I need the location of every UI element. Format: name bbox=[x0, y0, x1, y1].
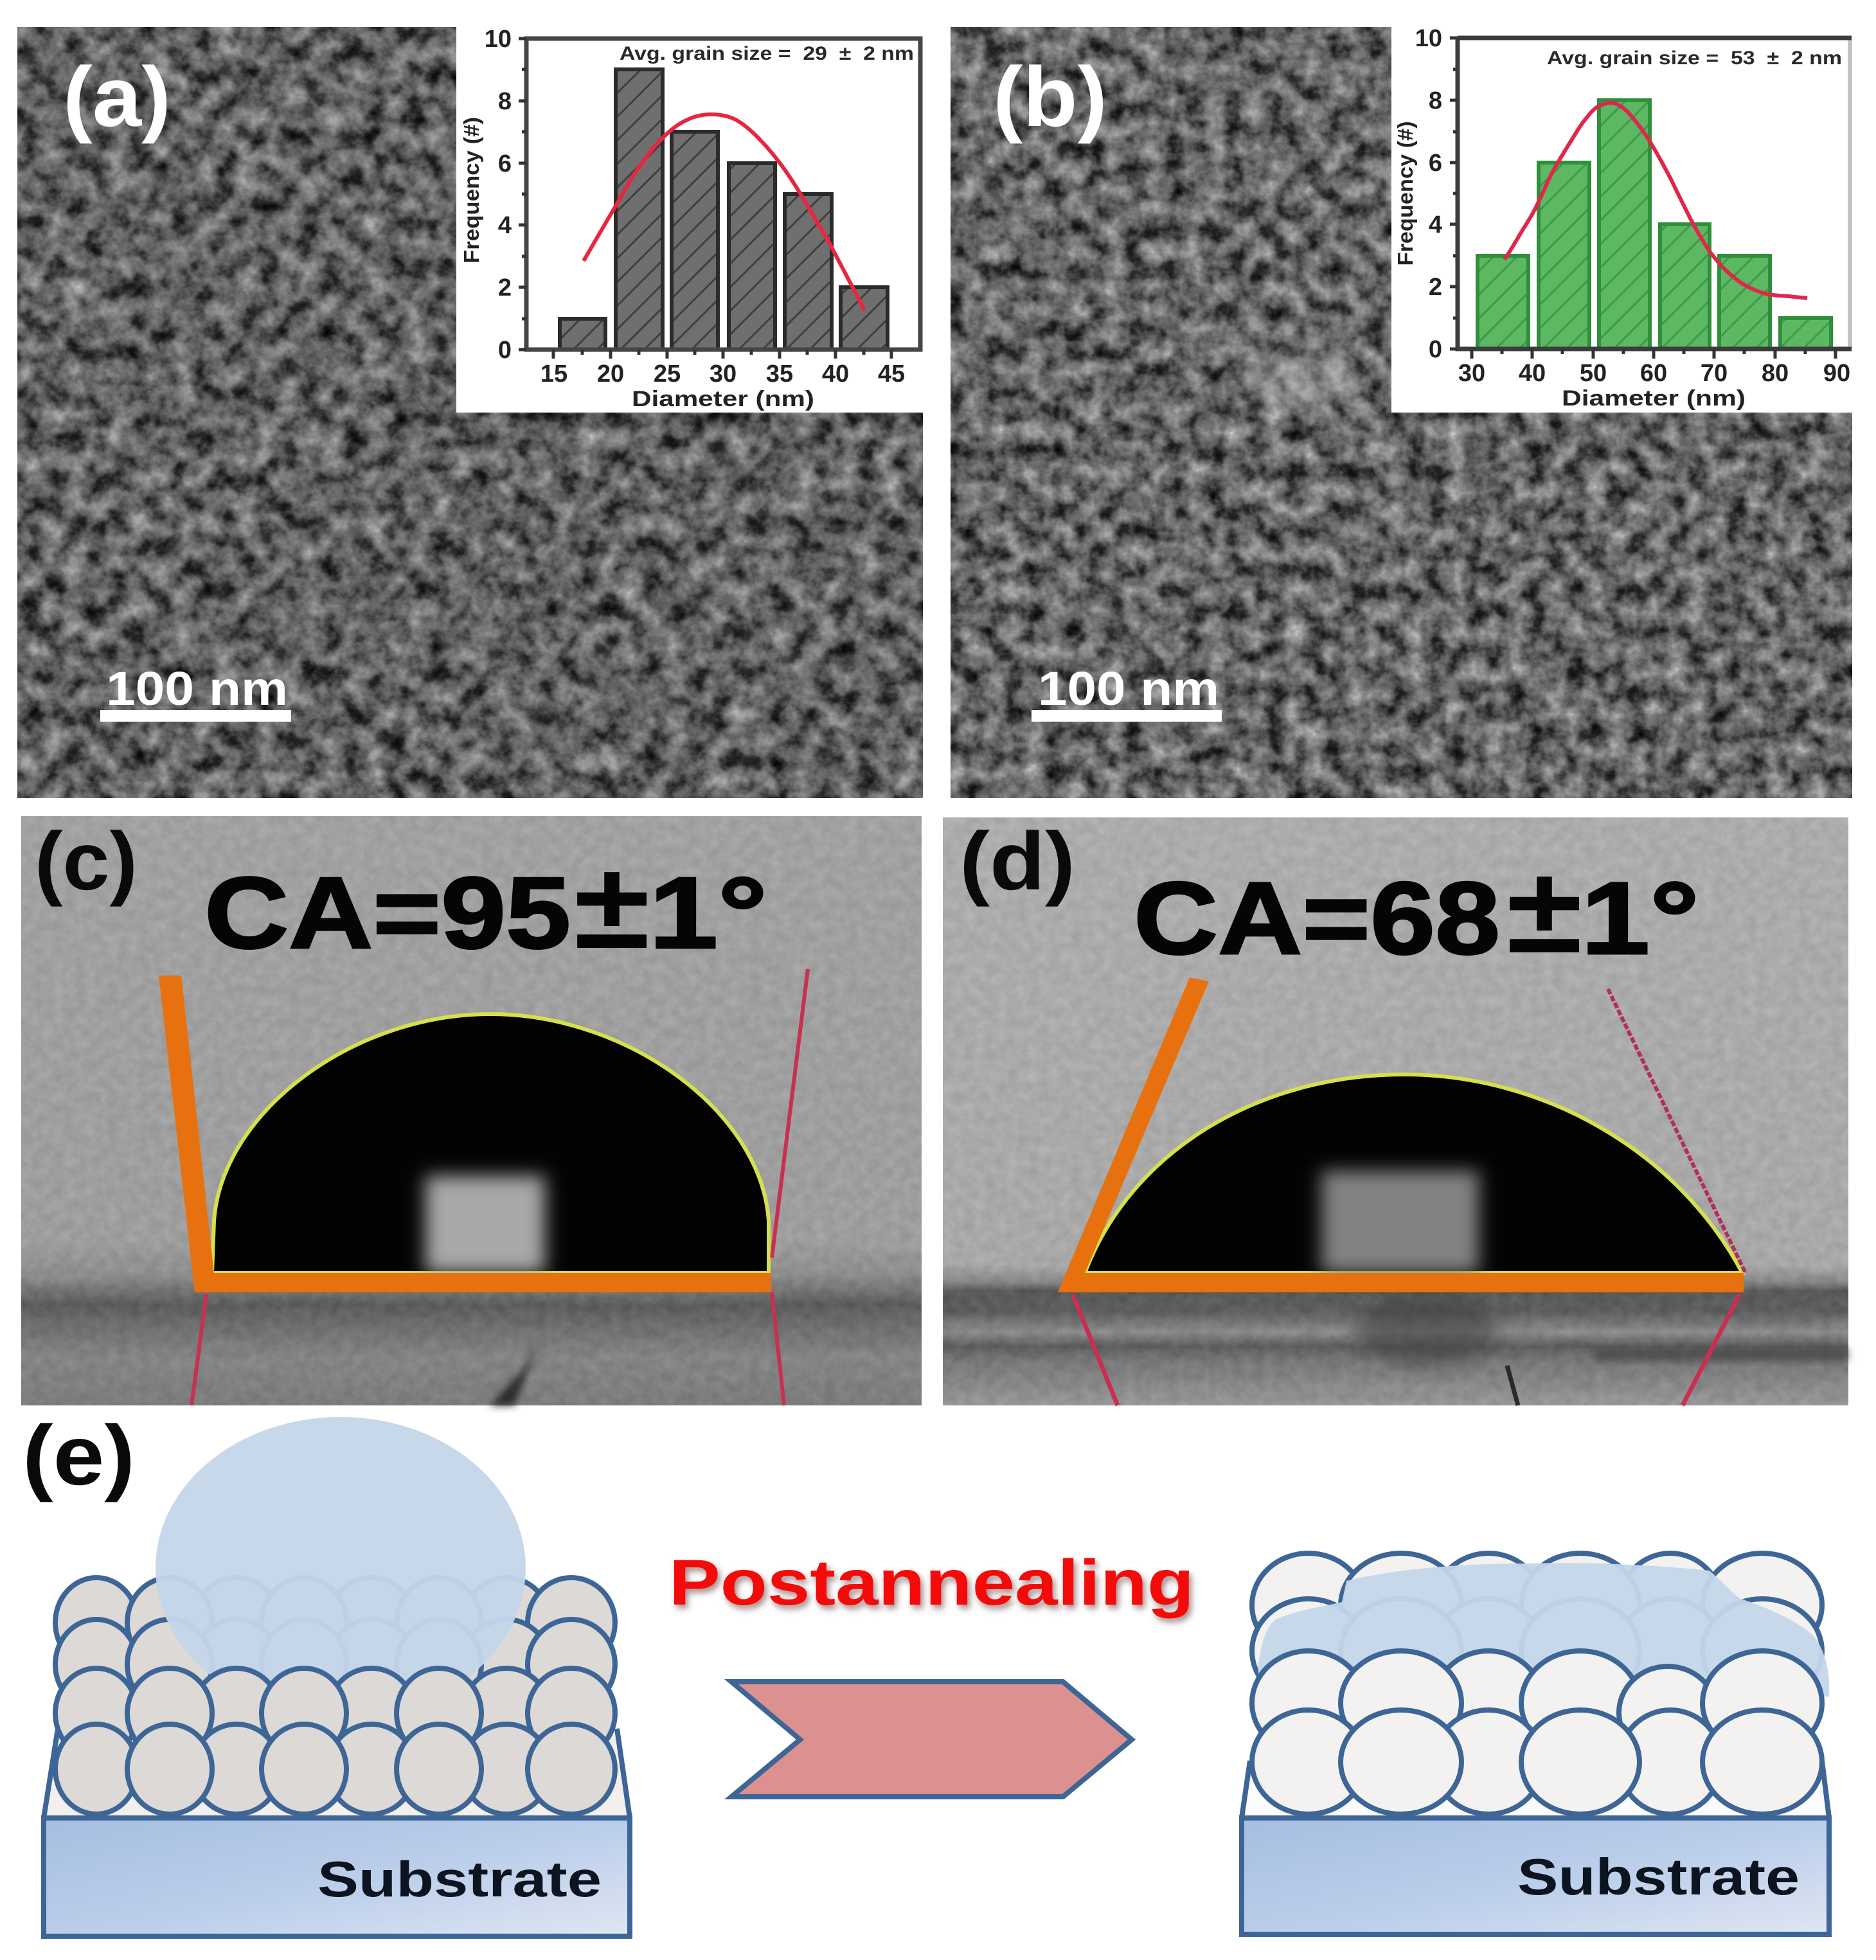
droplet inner reflection bbox=[425, 1176, 545, 1273]
y tick labels: 0 bbox=[498, 337, 512, 364]
x tick labels: 15 bbox=[540, 361, 567, 388]
substrate bbox=[1242, 1818, 1829, 1934]
contact angle value d: CA=68 bbox=[1134, 860, 1500, 976]
grey photo background bbox=[21, 816, 922, 1405]
contact angle value c: CA=95 bbox=[204, 857, 571, 970]
film base bbox=[44, 1729, 630, 1818]
label a: (a) bbox=[63, 49, 171, 144]
panel e: postannealing wetting schematic bbox=[22, 1408, 1829, 1936]
right grey edge bbox=[1848, 40, 1852, 348]
inset white background bbox=[456, 13, 923, 413]
substrate bbox=[44, 1818, 630, 1936]
x tick labels: 30 bbox=[710, 361, 737, 388]
axes bbox=[1458, 38, 1852, 349]
process arrow bbox=[731, 1682, 1132, 1797]
dark band at right bbox=[1594, 1348, 1848, 1361]
x tick labels: 30 bbox=[1458, 360, 1485, 387]
substrate label: Substrate bbox=[317, 1851, 602, 1907]
x tick labels: 80 bbox=[1762, 360, 1789, 387]
y tick labels: 8 bbox=[1429, 87, 1442, 114]
smudge under droplet bbox=[1356, 1295, 1497, 1366]
y tick labels: 10 bbox=[485, 26, 512, 53]
bright particle cluster bbox=[1240, 350, 1362, 408]
contact angle value d: ± bbox=[1506, 842, 1582, 979]
y tick labels: 2 bbox=[498, 274, 512, 301]
SEM micrograph a bbox=[17, 27, 923, 798]
y axis title: Frequency (#) bbox=[1393, 121, 1417, 265]
y tick labels: 6 bbox=[1429, 150, 1442, 177]
x tick labels: 25 bbox=[654, 361, 681, 388]
panel d: contact angle 68 degrees bbox=[943, 815, 1848, 1405]
gaussian fit curve bbox=[584, 114, 864, 310]
x tick labels: 50 bbox=[1580, 360, 1607, 387]
x tick labels: 90 bbox=[1823, 360, 1850, 387]
average grain size note: Avg. grain size = 53 ± 2 nm bbox=[1547, 48, 1842, 69]
contact angle value c: 1° bbox=[649, 857, 767, 970]
water droplet bbox=[1085, 1074, 1742, 1273]
contact angle value d: 1° bbox=[1581, 860, 1699, 976]
x tick labels: 35 bbox=[766, 361, 793, 388]
top grain rows bbox=[1252, 1553, 1822, 1703]
contact angle value c: ± bbox=[574, 838, 650, 974]
label e: (e) bbox=[22, 1408, 135, 1502]
y tick labels bbox=[485, 26, 512, 364]
x tick labels: 40 bbox=[1519, 360, 1546, 387]
label b: (b) bbox=[993, 49, 1107, 144]
left red tangent reflection bbox=[192, 1294, 206, 1405]
panel b: SEM image with grain size histogram bbox=[951, 13, 1852, 798]
schematic before annealing bbox=[44, 1417, 630, 1936]
film side edges bbox=[1242, 1761, 1829, 1818]
bars bbox=[560, 69, 888, 350]
scale bar a: 100 nm bbox=[106, 662, 288, 715]
film base bbox=[1242, 1754, 1829, 1818]
lower grain rows bbox=[55, 1668, 615, 1814]
x tick labels bbox=[1458, 360, 1850, 387]
y tick labels: 8 bbox=[498, 88, 512, 115]
substrate label: Substrate bbox=[1517, 1848, 1800, 1905]
lower red reflections bbox=[1073, 1294, 1740, 1405]
y tick labels: 2 bbox=[1429, 274, 1442, 301]
water droplet before annealing bbox=[156, 1417, 526, 1719]
film side edges bbox=[44, 1729, 630, 1818]
grey photo background bbox=[943, 817, 1848, 1405]
upper red tangent line bbox=[1608, 989, 1746, 1273]
y axis title: Frequency (#) bbox=[460, 117, 483, 263]
panel c: contact angle 95 degrees bbox=[21, 815, 922, 1405]
contact angle value c bbox=[204, 838, 767, 974]
panel a: SEM image with grain size histogram bbox=[17, 13, 923, 798]
orange angle marker bbox=[159, 976, 771, 1292]
inset white background bbox=[1391, 13, 1852, 413]
dark mark bbox=[1507, 1366, 1518, 1405]
x tick labels: 20 bbox=[597, 361, 624, 388]
dark streak reflection bbox=[490, 1343, 539, 1405]
x axis title: Diameter (nm) bbox=[1562, 386, 1746, 411]
y tick labels: 4 bbox=[498, 212, 512, 239]
average grain size note: Avg. grain size = 29 ± 2 nm bbox=[620, 43, 914, 64]
histogram inset b bbox=[1391, 13, 1852, 413]
droplet inner reflection bbox=[1321, 1171, 1479, 1273]
x tick labels bbox=[540, 361, 905, 388]
postannealing heading: Postannealing bbox=[669, 1547, 1194, 1619]
y tick labels: 6 bbox=[498, 150, 512, 177]
orange angle marker bbox=[1058, 977, 1744, 1292]
x tick labels: 40 bbox=[822, 361, 849, 388]
schematic after annealing bbox=[1242, 1553, 1829, 1934]
contact angle value d bbox=[1134, 842, 1699, 979]
top grain rows bbox=[55, 1578, 615, 1709]
axis ticks bbox=[1450, 38, 1836, 359]
photo grain overlay bbox=[943, 817, 1848, 1405]
x axis title: Diameter (nm) bbox=[632, 387, 814, 411]
spread water film bbox=[1258, 1563, 1829, 1697]
scale bar b: 100 nm bbox=[1038, 662, 1219, 715]
bars bbox=[1478, 100, 1831, 349]
lower grain rows bbox=[1252, 1651, 1822, 1814]
axis ticks bbox=[519, 39, 891, 359]
gaussian fit curve bbox=[1505, 103, 1807, 298]
label c: (c) bbox=[35, 815, 138, 907]
y tick labels: 10 bbox=[1415, 25, 1442, 52]
label d: (d) bbox=[960, 815, 1075, 907]
x tick labels: 70 bbox=[1701, 360, 1728, 387]
water droplet bbox=[212, 1014, 769, 1273]
x tick labels: 60 bbox=[1640, 360, 1667, 387]
right red tangent line bbox=[772, 969, 808, 1405]
photo grain overlay bbox=[21, 816, 922, 1405]
x tick labels: 45 bbox=[878, 361, 905, 388]
y tick labels: 0 bbox=[1429, 336, 1442, 363]
y tick labels: 4 bbox=[1429, 211, 1442, 238]
histogram inset a bbox=[456, 13, 923, 413]
axes frame bbox=[526, 39, 920, 350]
y tick labels bbox=[1415, 25, 1442, 363]
SEM micrograph b bbox=[951, 27, 1852, 798]
